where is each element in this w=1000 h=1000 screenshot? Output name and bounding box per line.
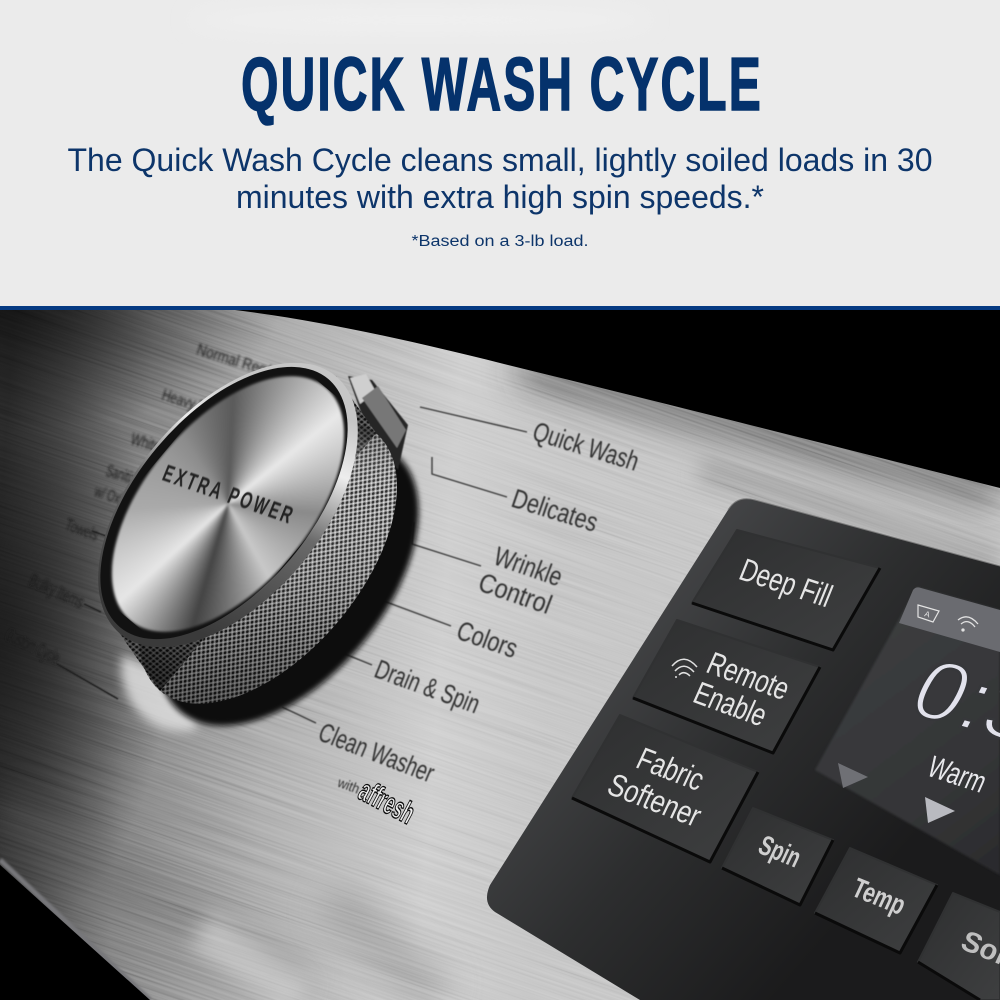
description text: The Quick Wash Cycle cleans small, lightly soiled loads in 30 [68,142,932,178]
dial highlight on plate [121,655,205,731]
button: Deep Fill [692,530,880,650]
button: Remote Enable [633,620,820,753]
left cycle lines [57,531,118,699]
blue divider [0,306,1000,310]
cycle labels, left of dial: w/ Oxi [92,483,124,508]
button: Deep Fill: Deep Fill [735,552,838,614]
header band [0,0,1000,306]
cycle labels, right of dial [314,416,643,797]
cycle labels, left of dial: Whites [129,429,169,458]
cycle labels, left of dial [2,341,273,669]
cycle labels, left of dial: Sanitize [104,461,144,490]
button: Fabric Softener [572,715,758,862]
cycle labels, right of dial: Quick Wash [529,416,643,477]
display icon: tub [918,605,939,622]
description text: minutes with extra high spin speeds.* [236,179,764,215]
cycle labels, right of dial: Clean Washer [314,717,439,788]
pointer [348,374,408,470]
display icon: tub: A [923,609,932,620]
cycle labels, right of dial: Wrinkle [490,541,567,592]
cycle labels, right of dial: Delicates [508,483,602,538]
button: Temp [815,848,937,953]
knurled side [90,374,446,750]
cycle labels, right of dial: Colors [453,615,522,664]
dial lettering: EXTRA POWER [159,461,299,530]
button: Fabric Softener: Softener [602,766,707,834]
display icon: wifi [958,617,978,631]
button: Spin [722,808,833,905]
cycle labels, right of dial: with [335,774,362,797]
affresh logo: affresh [353,773,421,831]
button: Fabric Softener: Fabric [631,741,710,798]
cycle labels, left of dial: Bulky Items [25,571,87,613]
photo: washer control panel [0,310,1000,1000]
description text [68,142,932,215]
cycle labels, left of dial: Normal Reg/ [194,341,273,380]
cycle labels, left of dial: Towels [63,515,101,545]
outer rim [48,316,408,694]
control panel [487,499,1000,1000]
title: QUICK WASH CYCLE [241,43,763,127]
cycle labels, right of dial: Control [474,567,556,620]
cycle labels, right of dial: Drain & Spin [371,654,484,719]
display [815,587,1000,875]
cycle labels, left of dial: Custom Cycle [2,625,63,669]
button: Soil [918,893,1000,1000]
button: Remote Enable: Enable [688,675,773,733]
button: Temp: Temp [847,872,911,921]
dial knob [48,316,470,773]
button: Spin: Spin [754,829,806,873]
cycle labels, left of dial: Heavy D [160,387,209,417]
display arrows [838,763,868,788]
footnote: *Based on a 3-lb load. [412,233,588,250]
display status bar [899,587,1000,652]
button: Remote Enable: Remote [702,645,795,707]
cycle label lines [282,407,527,723]
dial drop shadow [106,393,470,773]
dial face [67,335,389,673]
brushed steel plate [0,310,1000,1000]
